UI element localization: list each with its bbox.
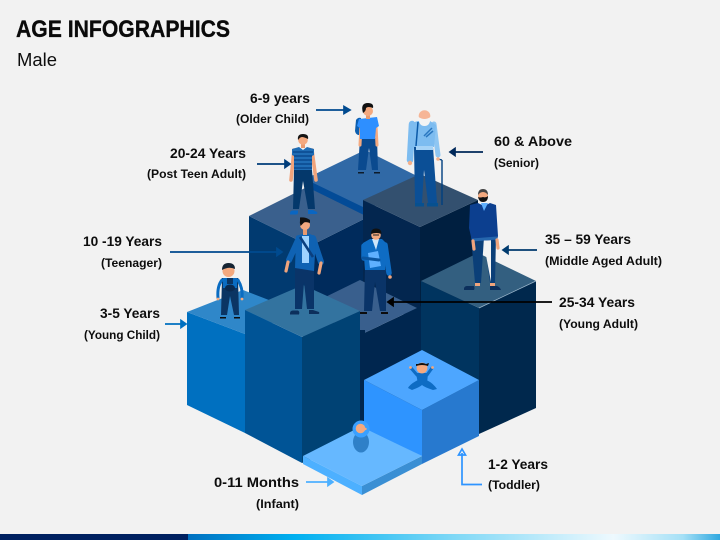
arrow: 25-34 years bbox=[388, 298, 552, 306]
label: 1-2 years: (Toddler) bbox=[488, 478, 540, 492]
block: 60 and above bbox=[363, 174, 478, 320]
block: 35-59 years bbox=[421, 253, 536, 436]
label: 10-19 years: (Teenager) bbox=[101, 256, 162, 270]
figure: middle aged adult bbox=[464, 189, 501, 290]
block: 0-11 months bbox=[303, 426, 422, 495]
label: 3-5 years: (Young Child) bbox=[84, 328, 160, 342]
label: 6-9 years bbox=[236, 90, 310, 126]
figure: teenager bbox=[286, 217, 321, 314]
arrow: 6-9 years bbox=[316, 106, 350, 114]
label: 20-24 years: 20-24 Years bbox=[170, 145, 246, 161]
label: 0-11 months bbox=[214, 474, 299, 511]
block: 10-19 years bbox=[245, 285, 360, 463]
figure: older child bbox=[355, 103, 380, 174]
arrow: 3-5 years bbox=[165, 320, 186, 328]
sliver behind infant block bbox=[360, 330, 365, 440]
subtitle: Male bbox=[17, 50, 57, 70]
label: 3-5 years bbox=[84, 305, 160, 342]
block: 25-34 years bbox=[303, 280, 421, 450]
block: 3-5 years bbox=[187, 290, 300, 433]
label: 25-34 years bbox=[559, 294, 638, 331]
label: 60 and above: (Senior) bbox=[494, 156, 539, 170]
footer bar bbox=[0, 534, 720, 540]
figure: young adult bbox=[360, 228, 392, 314]
label: 10-19 years bbox=[83, 233, 162, 270]
label: 3-5 years: 3-5 Years bbox=[100, 305, 160, 321]
figure: infant bbox=[352, 420, 370, 452]
label: 20-24 years bbox=[147, 145, 246, 181]
block: 6-9 years bbox=[305, 150, 425, 218]
label: 25-34 years: (Young Adult) bbox=[559, 317, 638, 331]
block: 1-2 years bbox=[364, 350, 479, 464]
label: 6-9 years: 6-9 years bbox=[250, 90, 310, 106]
figure: post teen adult bbox=[290, 134, 317, 214]
label: 60 and above bbox=[494, 133, 572, 170]
label: 35-59 years bbox=[545, 231, 662, 268]
arrow: 35-59 years bbox=[503, 246, 537, 254]
arrow: 10-19 years bbox=[170, 248, 282, 256]
isometric stepped blocks bbox=[187, 150, 536, 495]
label: 60 and above: 60 & Above bbox=[494, 133, 572, 149]
figure: young child bbox=[217, 263, 243, 318]
label: 1-2 years bbox=[488, 456, 548, 492]
block: 20-24 years bbox=[249, 187, 368, 340]
title: AGE INFOGRAPHICS bbox=[16, 16, 230, 43]
figure: toddler bbox=[408, 363, 437, 390]
figure: senior bbox=[408, 110, 442, 206]
label: 35-59 years: 35 – 59 Years bbox=[545, 231, 631, 247]
arrow: 0-11 months bbox=[306, 478, 333, 486]
arrow: 20-24 years bbox=[257, 160, 290, 168]
label: 20-24 years: (Post Teen Adult) bbox=[147, 167, 246, 181]
label: 10-19 years: 10 -19 Years bbox=[83, 233, 162, 249]
arrow: 1-2 years bbox=[458, 449, 482, 484]
arrow: 60 and above bbox=[450, 148, 483, 156]
label: 0-11 months: (Infant) bbox=[256, 497, 299, 511]
label: 0-11 months: 0-11 Months bbox=[214, 474, 299, 490]
label: 25-34 years: 25-34 Years bbox=[559, 294, 635, 310]
label: 1-2 years: 1-2 Years bbox=[488, 456, 548, 472]
label: 35-59 years: (Middle Aged Adult) bbox=[545, 254, 662, 268]
label: 6-9 years: (Older Child) bbox=[236, 112, 309, 126]
